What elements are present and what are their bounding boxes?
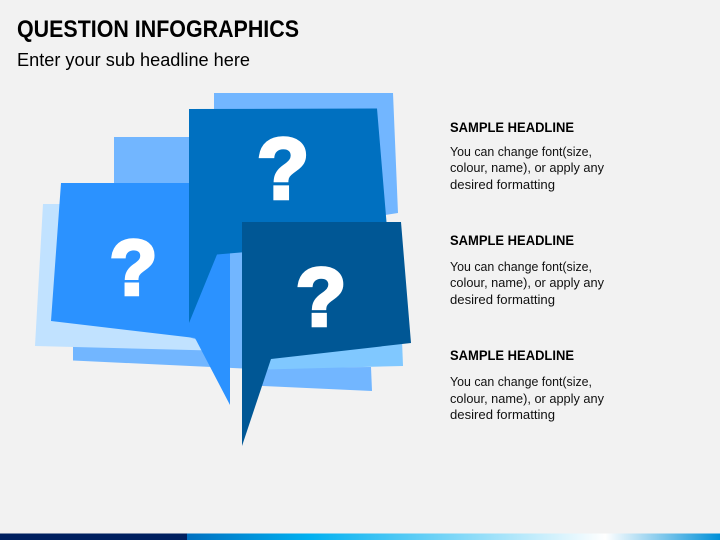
text block 1 bbox=[450, 120, 605, 192]
body 2: colour, name), or apply any bbox=[450, 276, 605, 290]
bubble: darkest blue bbox=[242, 222, 411, 446]
body 3: colour, name), or apply any bbox=[450, 392, 605, 406]
back panel: lower left bbox=[73, 137, 243, 368]
subtitle: Enter your sub headline here bbox=[17, 50, 250, 70]
bubble: medium blue bbox=[51, 183, 230, 405]
headline 1: SAMPLE HEADLINE bbox=[450, 120, 574, 135]
footer bar bbox=[0, 534, 720, 540]
body 3: You can change font(size, bbox=[450, 375, 592, 389]
body 2: You can change font(size, bbox=[450, 260, 592, 274]
body 1: You can change font(size, bbox=[450, 145, 592, 159]
bubble: dark blue bbox=[189, 108, 388, 323]
body 3: desired formatting bbox=[450, 408, 555, 422]
headline 3: SAMPLE HEADLINE bbox=[450, 348, 574, 363]
text block 2 bbox=[450, 233, 605, 307]
back panel: upper right bbox=[214, 93, 398, 228]
question mark: right: ? bbox=[296, 250, 346, 344]
speech bubble graphic bbox=[35, 93, 411, 446]
text block 3 bbox=[450, 348, 605, 422]
question mark: top: ? bbox=[257, 122, 309, 218]
back panel: lower right bbox=[250, 367, 372, 391]
body 1: colour, name), or apply any bbox=[450, 161, 605, 175]
title: QUESTION INFOGRAPHICS bbox=[17, 16, 299, 43]
back panel: pale left bbox=[35, 204, 230, 351]
body 3 bbox=[450, 375, 605, 422]
back panel: light strip right bbox=[243, 250, 403, 370]
question mark: left: ? bbox=[110, 224, 157, 312]
body 2 bbox=[450, 260, 605, 307]
body 2: desired formatting bbox=[450, 293, 555, 307]
body 1 bbox=[450, 145, 605, 192]
headline 2: SAMPLE HEADLINE bbox=[450, 233, 574, 248]
body 1: desired formatting bbox=[450, 178, 555, 192]
